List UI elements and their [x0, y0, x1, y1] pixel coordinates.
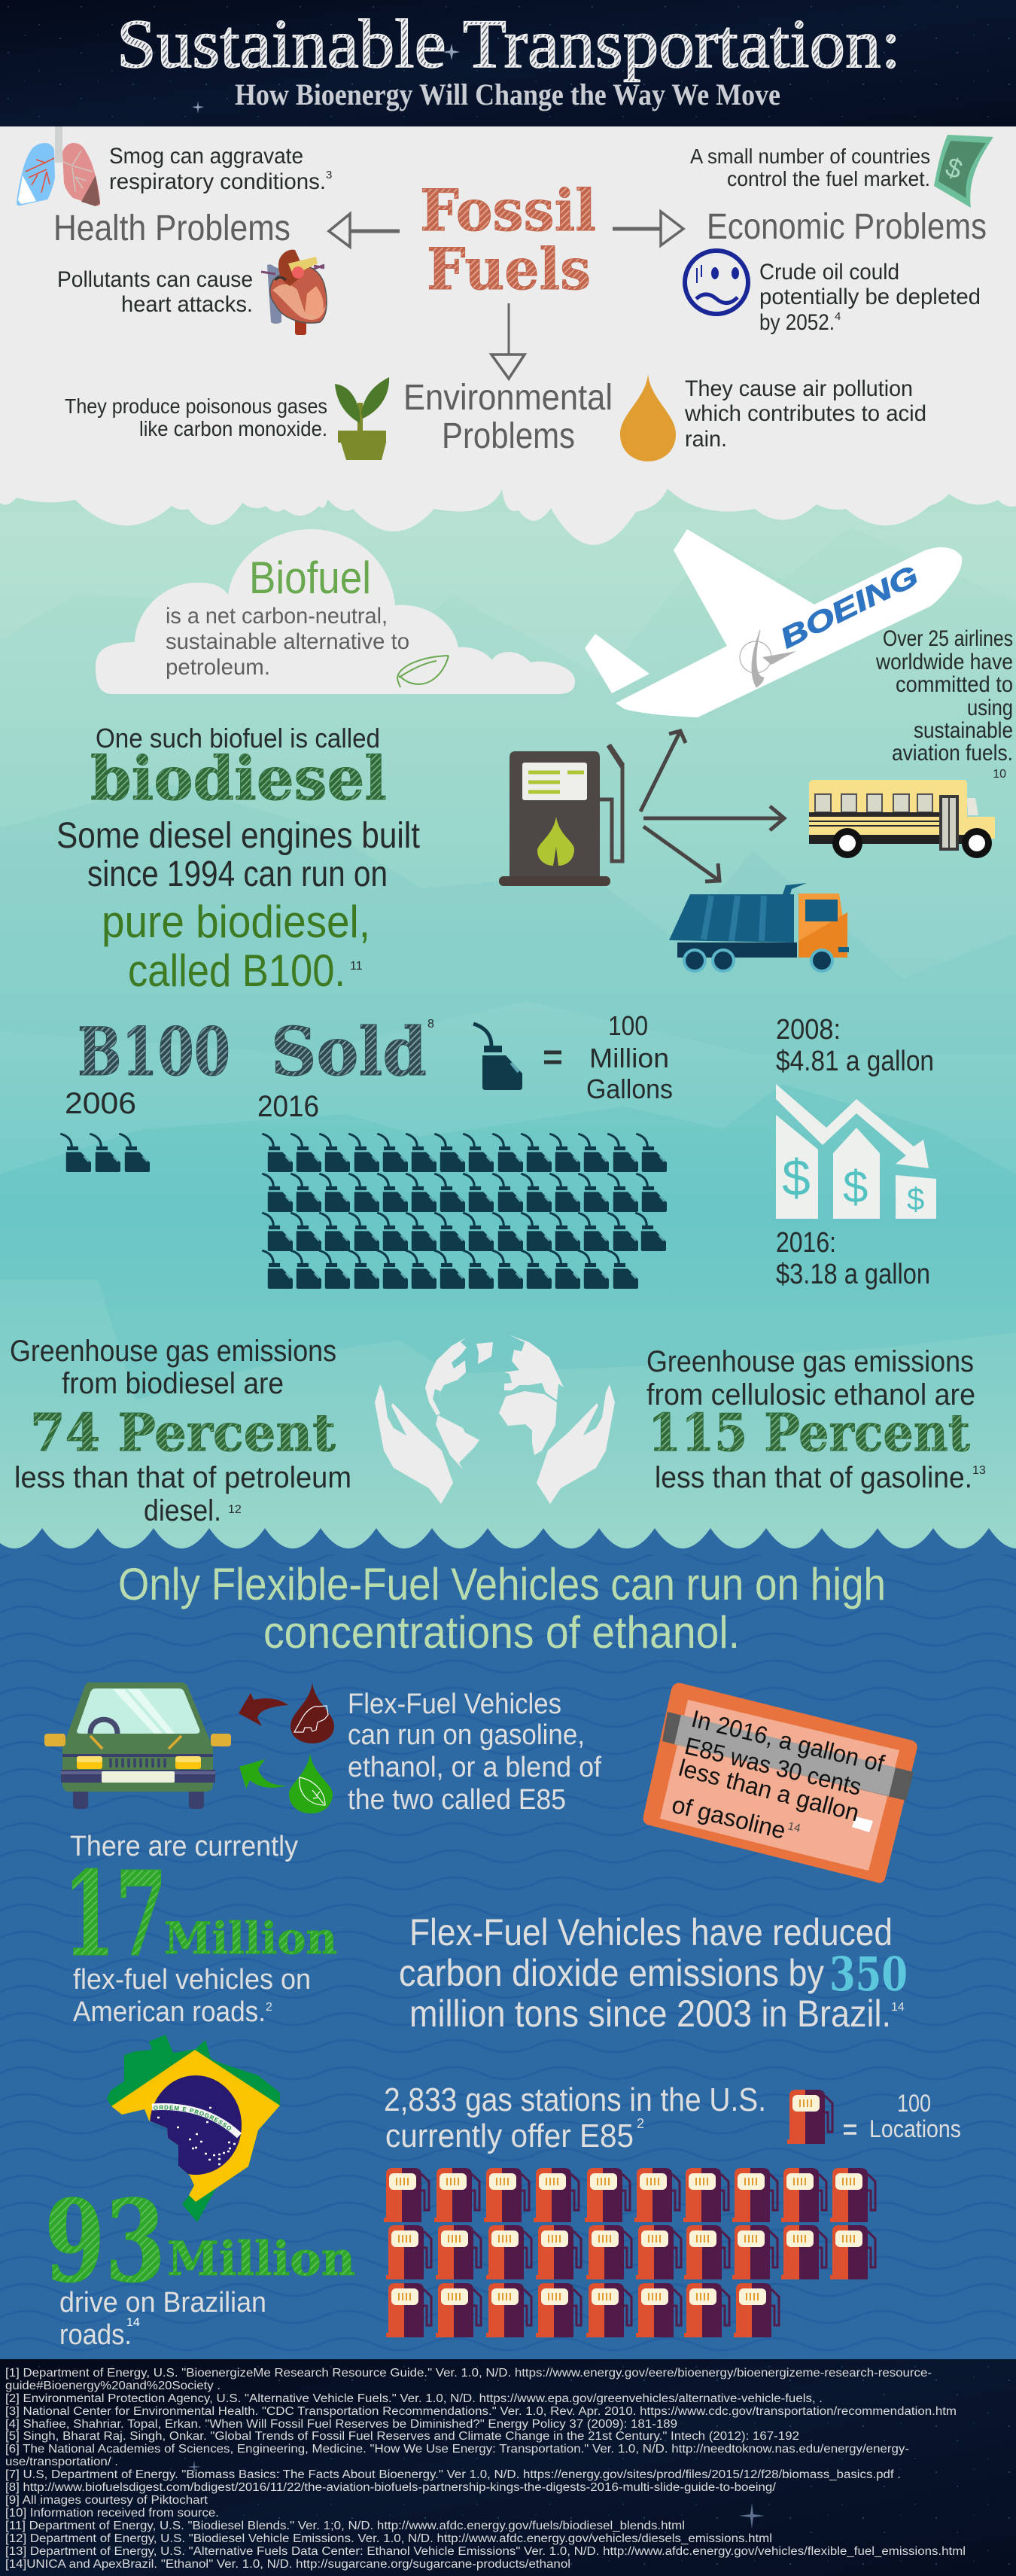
text: citations: [8] http://www.biofuelsdigest.com/bdigest/2016/11/22/the-aviation-biofuels-partnership-kings-the-digests-2016-multi-slide-guide-to-boeing/: [5, 2481, 777, 2494]
stat: biodiesel emissions: 12: [228, 1503, 242, 1516]
heading: b100 sold: Sold: [271, 1012, 427, 1091]
text: gas stations: currently offer E85: [385, 2118, 634, 2154]
logo: boeing mark: [740, 630, 796, 687]
text: flex-fuel description: can run on gasoline,: [348, 1719, 585, 1751]
legend: jug equals 100 million gallons: 100: [608, 1010, 648, 1041]
text: citations: [11] Department of Energy, U.S. "Biodiesel Blends." Ver. 1;0, N/D. http://www.afdc.energy.gov/fuels/biodiesel_blends.html: [5, 2520, 685, 2532]
icon: brazil flag map: ORDEM E PROGRESSO: [154, 2105, 232, 2130]
text: crude oil: [759, 260, 981, 335]
heading: b100 sold: [78, 1012, 434, 1091]
text: air pollution: which contributes to acid: [684, 401, 926, 426]
text: crude oil: 4: [835, 310, 841, 323]
stat: co2 reduction: 350: [829, 1947, 908, 2002]
text: 2008 price: [776, 1014, 934, 1077]
text: crude oil: by 2052.: [759, 310, 835, 335]
figure: 74 percent: 74 Percent: [30, 1403, 336, 1463]
icon: fossil fuel drop: [291, 1682, 334, 1743]
panel: blue ethanol section background: [0, 1528, 1016, 2359]
heading: environmental problems: Problems: [442, 416, 575, 456]
icon: money: $: [941, 151, 966, 185]
panel: biofuel cloud: [96, 529, 575, 694]
pictogram: fuel pumps: [384, 2168, 875, 2337]
text: air pollution: rain.: [685, 427, 727, 452]
stat: biodiesel emissions: less than that of petroleum: [14, 1461, 351, 1494]
pictogram: 2016: [257, 1090, 667, 1289]
arrow: ethanol into car: [239, 1759, 287, 1789]
stat: cellulosic ethanol emissions: Greenhouse gas emissions: [646, 1345, 974, 1378]
icon: sad face: [685, 251, 748, 314]
subtitle: How Bioenergy Will Change the Way We Move: [235, 78, 780, 111]
icon: boeing airplane: [585, 529, 962, 717]
stat: 93 million: 14: [126, 2316, 140, 2329]
text: air pollution: [684, 376, 926, 452]
stat: 17 million: [63, 1831, 337, 2028]
heading: flexible-fuel vehicles: Only Flexible-Fuel Vehicles can run on high: [118, 1559, 886, 1609]
heading: environmental problems: Environmental: [403, 378, 613, 418]
text: citations: [14]UNICA and ApexBrazil. "Ethanol" Ver. 1.0, N/D. http://sugarcane.org/sugarcane-products/ethanol: [5, 2558, 570, 2571]
text: air pollution: They cause air pollution: [685, 376, 913, 401]
stat: cellulosic ethanol emissions: [646, 1345, 986, 1494]
stat: 93 million: drive on Brazilian: [59, 2287, 266, 2319]
stat: biodiesel emissions: diesel.: [144, 1494, 221, 1527]
text: citations: [3] National Center for Environmental Health. "CDC Transportation Recommendations." Ver. 1.0, Rev. Apr. 2010. https://www.cdc.gov/transportation/recommendation.htm: [5, 2405, 957, 2418]
fossil fuels heading: [420, 177, 596, 303]
stat: co2 reduction: 14: [891, 2001, 905, 2014]
heading: b100 sold: B100: [78, 1012, 230, 1091]
text: definition: is a net carbon-neutral,: [166, 604, 388, 629]
stat: 93 million: 93: [44, 2176, 166, 2308]
text: airlines: [875, 626, 1013, 781]
text: biodiesel intro: called B100.: [128, 945, 345, 996]
text: citations: use/transportation/ .: [5, 2456, 118, 2468]
text: gas stations: 2,833 gas stations in the U.S.: [384, 2081, 766, 2118]
text: citations: [6] The National Academies of Sciences, Engineering, Medicine. "How We Use Energy: Transportation." Ver. 1.0, N/D. http://needtoknow.nas.edu/energy/energy-: [5, 2443, 909, 2456]
stat: biodiesel emissions: from biodiesel are: [62, 1367, 284, 1400]
text: airlines: 10: [993, 768, 1006, 781]
text: smog: 3: [326, 169, 332, 181]
text: fuel market: control the fuel market.: [727, 167, 930, 190]
arrow: to health problems: [329, 214, 400, 247]
heading: b100 sold: 8: [427, 1018, 434, 1031]
text: citations: [5, 2367, 966, 2571]
fossil fuels heading: Fossil: [420, 177, 596, 244]
pictogram: 2016: 2016: [257, 1090, 319, 1123]
text: citations: [13] Department of Energy, U.S. "Alternative Fuels Data Center: Ethanol Vehicle Emissions" Ver. 1.0, N/D. http://www.afdc.energy.gov/vehicles/flexible_fuel_emissions.html: [5, 2545, 966, 2558]
icon: leaf outline: [397, 656, 449, 687]
icon: school bus: [809, 780, 995, 858]
stat: 17 million: 17: [63, 1845, 167, 1983]
heading: health problems: Health Problems: [53, 209, 291, 248]
callout: price sign: In 2016, a gallon of: [689, 1705, 887, 1777]
panel: references footer: [0, 2359, 1016, 2576]
text: citations: [12] Department of Energy, U.S. "Biodiesel Vehicle Emissions. Ver. 1.0, N/D. http://www.afdc.energy.gov/vehicles/diesels_emissions.html: [5, 2532, 772, 2545]
stat: 93 million: roads.: [59, 2319, 132, 2351]
icon: car: [44, 1682, 231, 1809]
arrow: to environmental problems: [491, 303, 525, 379]
text: definition: [166, 604, 409, 680]
stat: co2 reduction: Flex-Fuel Vehicles have reduced: [409, 1911, 893, 1953]
text: gas stations: 2: [637, 2116, 644, 2131]
heading: biofuel: Biofuel: [249, 553, 371, 603]
text: poisonous gases: like carbon monoxide.: [139, 417, 327, 440]
text: biodiesel intro: 11: [350, 960, 363, 973]
text: definition: petroleum.: [166, 655, 270, 680]
text: citations: [7] U.S, Department of Energy. "Biomass Basics: The Facts About Bioenergy." Ver 1.0, N/D. https://energy.gov/sites/prod/files/2015/12/f28/biomass_basics.pdf .: [5, 2468, 901, 2481]
heading: environmental problems: [403, 378, 613, 456]
text: fuel market: [690, 145, 930, 190]
stat: 17 million: 2: [266, 2001, 272, 2014]
arrows: pump to vehicles: [640, 731, 784, 882]
icon: money: [934, 135, 993, 208]
icon: falling price chart: $: [843, 1162, 868, 1212]
text: smog: respiratory conditions.: [109, 169, 326, 194]
background: teal biofuel section: [0, 482, 1016, 1551]
icon: fuel pump with leaf: [499, 744, 625, 886]
text: biodiesel intro: pure biodiesel,: [102, 897, 370, 947]
legend: pump equals 100 locations: Locations: [869, 2115, 961, 2142]
label: boeing: BOEING: [775, 560, 923, 655]
text: poisonous gases: [65, 394, 327, 440]
header banner: [0, 0, 1016, 126]
icon: globe in hands: [375, 1335, 615, 1504]
icon: falling price chart: $: [907, 1181, 924, 1216]
text: flex-fuel description: Flex-Fuel Vehicles: [348, 1688, 561, 1720]
legend: pump equals 100 locations: [787, 2090, 961, 2144]
icon: plant: [335, 377, 389, 460]
fossil fuels heading: Fuels: [427, 236, 591, 303]
callout: price sign: 14: [786, 1819, 802, 1835]
text: definition: sustainable alternative to: [166, 629, 409, 654]
text: crude oil: potentially be depleted: [759, 285, 981, 309]
text: pollutants: heart attacks.: [121, 292, 253, 317]
text: citations: guide#Bioenergy%20and%20Society .: [5, 2380, 221, 2392]
stat: biodiesel emissions: Greenhouse gas emissions: [10, 1335, 336, 1368]
title: Sustainable Transportation:: [117, 5, 901, 82]
icon: falling price chart: $: [782, 1149, 811, 1207]
text: 2016 price: $3.18 a gallon: [776, 1259, 930, 1290]
stat: 17 million: Million: [164, 1913, 337, 1964]
legend: jug equals 100 million gallons: [473, 1010, 673, 1104]
text: flex-fuel description: the two called E85: [348, 1784, 566, 1816]
text: citations: [4] Shafiee, Shahriar. Topal, Erkan. "When Will Fossil Fuel Reserves be Diminished?" Energy Policy 37 (2009): 181-189: [5, 2418, 677, 2431]
legend: jug equals 100 million gallons: Million: [589, 1043, 669, 1073]
callout: price sign: [643, 1683, 917, 1883]
text: 2016 price: [776, 1227, 930, 1290]
stat: co2 reduction: carbon dioxide emissions by: [399, 1952, 824, 1994]
text: biodiesel intro: One such biofuel is called: [96, 723, 380, 754]
figure: 115 percent: 115 Percent: [648, 1403, 971, 1463]
text: citations: [10] Information received from source.: [5, 2507, 219, 2520]
text: 2016 price: 2016:: [776, 1227, 836, 1259]
text: flex-fuel description: [348, 1688, 601, 1816]
stat: co2 reduction: million tons since 2003 in Brazil.: [409, 1993, 891, 2035]
text: poisonous gases: They produce poisonous gases: [65, 394, 327, 418]
text: 2008 price: $4.81 a gallon: [776, 1046, 934, 1077]
text: flex-fuel description: ethanol, or a blend of: [348, 1752, 601, 1783]
legend: pump equals 100 locations: 100: [897, 2090, 931, 2117]
text: biodiesel intro: Some diesel engines built: [56, 816, 420, 856]
panel: fossil fuels grey cloud section: [0, 126, 1016, 545]
stat: 93 million: Million: [167, 2231, 355, 2286]
arrow: to economic problems: [613, 212, 683, 245]
stat: 17 million: American roads.: [73, 1996, 266, 2028]
stat: cellulosic ethanol emissions: less than that of gasoline.: [655, 1461, 972, 1494]
text: smog: Smog can aggravate: [109, 144, 303, 169]
callout: price sign: E85 was 30 cents: [682, 1732, 864, 1801]
icon: lungs: [17, 126, 100, 206]
stat: biodiesel emissions: [10, 1335, 351, 1527]
text: smog: [109, 144, 332, 194]
stat: co2 reduction: [399, 1911, 908, 2035]
text: crude oil: Crude oil could: [759, 260, 899, 285]
callout: price sign: less than a gallon: [676, 1754, 862, 1826]
legend: jug equals 100 million gallons: Gallons: [586, 1073, 673, 1104]
text: citations: [1] Department of Energy, U.S. "BioenergizeMe Research Resource Guide." Ver. 1.0, N/D. https://www.energy.gov/eere/bioenergy/bioenergizeme-research-resource-: [5, 2367, 932, 2380]
icon: falling price chart: [776, 1084, 936, 1219]
heading: biodiesel: biodiesel: [90, 743, 387, 814]
text: fuel market: A small number of countries: [690, 145, 930, 168]
icon: truck: [669, 883, 849, 973]
text: pollutants: Pollutants can cause: [57, 267, 253, 292]
stat: 17 million: flex-fuel vehicles on: [73, 1964, 311, 1996]
stat: 93 million: [44, 2176, 355, 2351]
text: gas stations: [384, 2081, 766, 2154]
icon: heart: [261, 250, 327, 335]
text: citations: [9] All images courtesy of Piktochart: [5, 2494, 208, 2507]
text: biodiesel intro: [56, 723, 420, 996]
stat: 17 million: There are currently: [70, 1831, 298, 1862]
text: citations: [2] Environmental Protection Agency, U.S. "Alternative Vehicle Fuels." Ver. 1.0, N/D. https://www.epa.gov/greenvehicles/alternative-vehicle-fuels, .: [5, 2392, 823, 2405]
stat: cellulosic ethanol emissions: from cellulosic ethanol are: [646, 1378, 975, 1411]
text: pollutants: [57, 267, 253, 317]
text: biodiesel intro: since 1994 can run on: [87, 854, 388, 894]
stat: cellulosic ethanol emissions: 13: [972, 1464, 986, 1477]
heading: flexible-fuel vehicles: concentrations of ethanol.: [263, 1607, 740, 1658]
text: 2008 price: 2008:: [776, 1014, 841, 1046]
arrow: fossil into car: [239, 1693, 288, 1726]
pictogram: 2006: [60, 1087, 150, 1172]
heading: flexible-fuel vehicles: [118, 1559, 886, 1658]
icon: ethanol drop: [289, 1753, 333, 1813]
callout: price sign: of gasoline: [669, 1791, 789, 1844]
pictogram: 2006: 2006: [65, 1087, 136, 1120]
icon: brazil flag map: [107, 2035, 280, 2222]
icon: oil drop: [620, 374, 676, 461]
text: citations: [5] Singh, Bharat Raj. Singh, Onkar. "Global Trends of Fossil Fuel Reserves and Climate Change in the 21st Century." Intech (2012): 167-192: [5, 2430, 799, 2443]
